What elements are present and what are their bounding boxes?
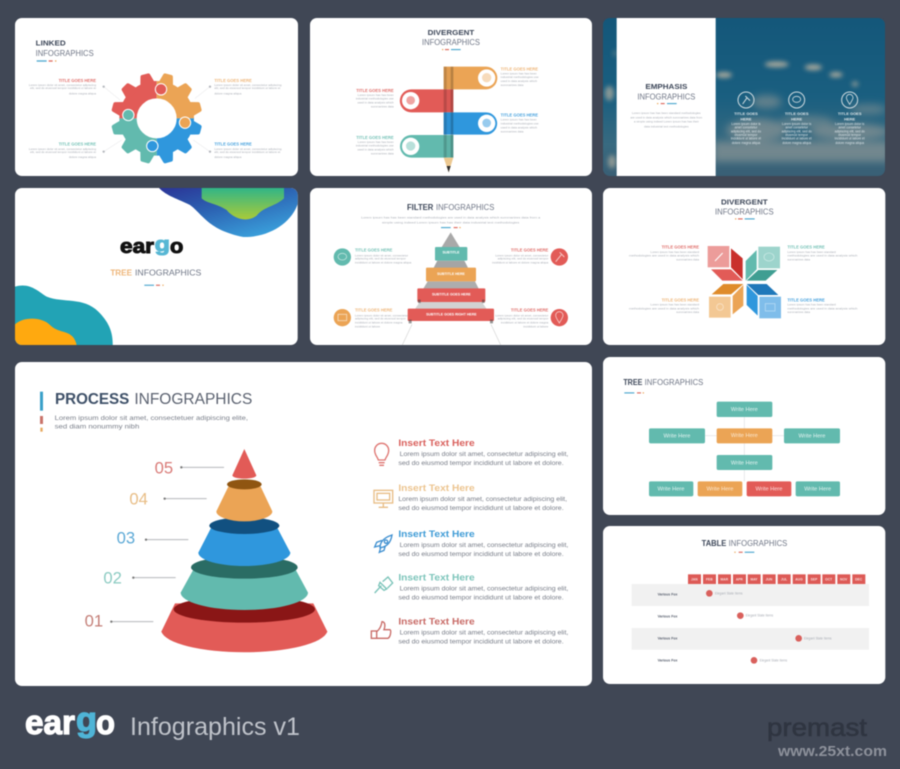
label: bottom left: Lorem ipsum has has been standard	[651, 303, 699, 307]
item 2: monitor: Lorem ipsum dolor sit amet, consectetur adipiscing elit,	[398, 496, 567, 503]
label: bottom left: Lorem ipsum dolor sit amet, consectetur adipiscing	[29, 147, 96, 151]
column: pin: eiusmod tempor	[735, 133, 757, 137]
label: top left: TITLE GOES HERE	[59, 78, 96, 83]
label: top right: methodologies are used in data analysis which	[787, 254, 858, 258]
heading: process	[40, 391, 252, 432]
item: top left: Lorem ipsum dolor sit amet, consectetur	[355, 253, 408, 257]
item: top left: adipiscing elit, sed do eiusmod tempor	[355, 257, 406, 261]
stacked filter pyramid: SUBTITLE	[442, 251, 460, 255]
panel: divergent cubes infographics	[603, 188, 885, 345]
paragraph: data industrial text methodologies	[644, 124, 689, 128]
label: orange: industrial methodologies use	[501, 75, 539, 79]
column: speech bubble: amet consetetur	[785, 126, 808, 130]
number labels with arrows: 01	[85, 612, 103, 631]
label: bottom right: dolore magna aliqua	[214, 155, 242, 159]
label: bottom left: methodologies are used in data analysis which	[629, 306, 699, 310]
label: bottom left: dolore magna aliqua	[69, 155, 96, 159]
item 1: bulb: Insert Text Here	[398, 438, 475, 448]
label: top left: summarizes data	[676, 257, 699, 261]
item 5: thumbs up: Insert Text Here	[398, 616, 475, 626]
footer logo: eargo: ear	[25, 704, 75, 742]
item: bottom right: incididunt ut labore et dolore magna	[501, 320, 549, 324]
table rows	[632, 584, 869, 664]
label: red: industrial methodologies use	[356, 97, 394, 101]
gear diagram	[104, 72, 210, 165]
item 3: rocket: Lorem ipsum dolor sit amet, consectetur adipiscing elit,	[400, 542, 569, 549]
item: top right: incididunt ut labore et dolore magna aliqua	[492, 261, 549, 265]
column: map marker: Lorem ipsum dolor is	[835, 122, 865, 126]
item: bottom right	[495, 308, 568, 328]
item 5: thumbs up	[371, 616, 569, 645]
tree chart: Write Here	[707, 487, 733, 493]
item: bottom right: incididunt ut labore	[523, 324, 549, 328]
label: top left: dolore magna aliqua	[69, 91, 96, 95]
label: top right: dolore magna aliqua	[214, 91, 242, 95]
label: red: TITLE GOES HERE	[356, 88, 394, 93]
panel: divergent pencil infographics	[310, 18, 592, 176]
tree chart: Write Here	[731, 433, 758, 439]
heading: process: PROCESS	[55, 391, 130, 408]
label: bottom right: Lorem ipsum has has been standard	[787, 303, 836, 307]
label: top left: TITLE GOES HERE	[662, 245, 699, 250]
eargo logo: g	[155, 233, 170, 256]
item: top right: Lorem ipsum dolor sit amet, consectetur	[495, 253, 548, 257]
heading: process: sed diam nonummy nibh	[55, 424, 140, 431]
label: top left	[29, 78, 105, 95]
label: bottom right: methodologies are used in data analysis which	[787, 306, 858, 310]
footer logo: eargo	[25, 701, 115, 742]
column: map marker: HERE	[844, 116, 856, 121]
label: red	[356, 88, 394, 109]
table rows: Various Fox	[658, 636, 677, 640]
item 1: bulb: Lorem ipsum dolor sit amet, consectetur adipiscing elit,	[400, 451, 569, 458]
label: teal	[356, 135, 394, 156]
pencil with flags	[400, 67, 497, 172]
heading: filter	[361, 202, 541, 228]
label: orange: used in data analysis which	[501, 79, 537, 83]
item: bottom left: adipiscing elit, sed do eiusmod tempor	[355, 317, 406, 321]
column: pin: Lorem ipsum dolor is	[731, 122, 761, 126]
heading: emphasis: INFOGRAPHICS	[637, 91, 696, 101]
heading: tree infographics: INFOGRAPHICS	[135, 268, 202, 278]
label: teal: TITLE GOES HERE	[356, 135, 394, 140]
label: bottom left	[629, 297, 699, 314]
column: speech bubble: eiusmod tempor	[785, 133, 808, 137]
heading: process: INFOGRAPHICS	[134, 391, 252, 408]
column: pin: dolore magna aliqua	[732, 141, 761, 145]
month header: SEP	[811, 577, 818, 581]
stacked filter pyramid	[402, 232, 501, 345]
item: top left	[334, 248, 412, 266]
item: top right: adipiscing elit, sed do eiusmod tempor	[498, 257, 548, 261]
label: bottom right	[209, 142, 282, 159]
label: top right	[209, 78, 282, 95]
tree chart: Write Here	[658, 487, 684, 493]
tree chart: Write Here	[804, 487, 831, 493]
eargo logo	[120, 233, 183, 258]
label: bottom right: elit, sed do eiusmod tempor incididunt ut labore et	[214, 150, 280, 154]
stacked filter pyramid: SUBTITLE GOES HERE	[432, 292, 471, 296]
item 2: monitor	[374, 483, 567, 512]
column: pin: TITLE GOES	[734, 111, 758, 116]
label: blue: summarizes data	[501, 129, 524, 133]
item: bottom right: TITLE GOES HERE	[511, 308, 549, 313]
tree chart	[649, 402, 840, 496]
stacked filter pyramid: SUBTITLE HERE	[437, 272, 466, 276]
label: bottom left: elit, sed do eiusmod tempor incididunt ut labore et	[30, 150, 96, 154]
column: map marker: dolore magna aliqua	[835, 141, 864, 145]
label: orange: summarizes data	[501, 83, 524, 87]
month header: FEB	[706, 577, 713, 581]
heading: tree: INFOGRAPHICS	[645, 377, 704, 387]
label: top left: methodologies are used in data analysis which	[629, 254, 699, 258]
column: pin: incididunt ut labore et	[731, 137, 761, 141]
bottom left blobs	[15, 286, 113, 347]
table rows: Elegant State Items	[715, 591, 743, 595]
month header: AUG	[795, 577, 803, 581]
month header: JUN	[766, 577, 773, 581]
panel: process infographics	[15, 362, 592, 686]
item 5: thumbs up: Lorem ipsum dolor sit amet, consectetur adipiscing elit,	[400, 629, 569, 636]
label: bottom right: Lorem ipsum dolor sit amet, consectetur adipiscing	[214, 147, 282, 151]
eargo logo: ear	[120, 235, 154, 258]
item 1: bulb	[375, 438, 569, 467]
item 3: rocket	[375, 529, 569, 558]
sky photo background	[603, 18, 890, 176]
panel: linked infographics	[15, 18, 298, 176]
item 2: monitor: sed do eiusmod tempor incididunt ut labore et dolore.	[398, 505, 564, 512]
table rows: Elegant State Items	[746, 614, 774, 618]
label: bottom right: summarizes data	[787, 310, 810, 314]
label: teal: summarizes data	[371, 152, 394, 156]
label: top right	[787, 245, 858, 261]
item: bottom left: incididunt ut labore	[355, 324, 380, 328]
label: orange: Lorem ipsum has has been	[501, 71, 537, 75]
column: speech bubble: incididunt ut labore et	[782, 137, 812, 141]
heading: divergent	[422, 28, 480, 50]
label: top right: summarizes data	[787, 257, 810, 261]
month header: APR	[736, 577, 743, 581]
white text column	[617, 18, 716, 176]
heading: filter: Lorem ipsum has has been standard methodologies are used in data analysis which summarizes data from a	[361, 215, 541, 219]
pyramid chart	[161, 449, 327, 652]
column: map marker: TITLE GOES	[838, 111, 862, 116]
label: blue: TITLE GOES HERE	[501, 113, 538, 118]
heading: divergent: INFOGRAPHICS	[422, 37, 480, 47]
heading: table	[702, 538, 788, 553]
heading: divergent: DIVERGENT	[428, 28, 475, 37]
label: top left: Lorem ipsum dolor sit amet, consectetur adipiscing	[29, 83, 96, 87]
column: pin: HERE	[740, 116, 752, 121]
item: top left: TITLE GOES HERE	[355, 248, 393, 253]
column: map marker: amet consetetur	[838, 126, 861, 130]
label: teal: industrial methodologies use	[356, 144, 394, 148]
heading: divergent: INFOGRAPHICS	[715, 206, 774, 216]
footer logo: eargo: o	[96, 704, 115, 742]
table rows: Elegant State Items	[760, 658, 788, 662]
label: top right: Lorem ipsum dolor sit amet, consectetur adipiscing	[214, 83, 282, 87]
label: blue: Lorem ipsum has has been	[501, 118, 537, 122]
heading: divergent: DIVERGENT	[721, 197, 768, 206]
item: bottom left: Lorem ipsum dolor sit amet, consectetur	[355, 313, 408, 317]
heading: filter: INFOGRAPHICS	[436, 202, 495, 212]
column: speech bubble: HERE	[791, 116, 803, 121]
table rows: Various Fox	[658, 615, 677, 619]
label: orange	[501, 66, 539, 87]
label: top left: Lorem ipsum has has been standard	[651, 250, 699, 254]
month header	[688, 574, 865, 584]
month header: MAR	[721, 577, 729, 581]
heading: divergent	[715, 197, 774, 219]
heading: linked: INFOGRAPHICS	[36, 48, 94, 58]
heading: tree: TREE	[623, 378, 643, 387]
heading: tree	[623, 377, 704, 393]
number labels with arrows	[85, 459, 224, 631]
item: top right: TITLE GOES HERE	[511, 248, 549, 253]
item 2: monitor: Insert Text Here	[398, 483, 475, 493]
label: blue: industrial methodologies use	[501, 121, 539, 125]
month header: JAN	[691, 577, 698, 581]
footer logo: eargo: g	[76, 701, 97, 739]
item: top left: incididunt ut labore et dolore magna aliqua	[355, 261, 412, 265]
paragraph: are used in data analysis which summarizes data from	[630, 115, 703, 119]
column: pin: amet consetetur	[735, 126, 757, 130]
label: teal: used in data analysis which	[357, 148, 394, 152]
panel: emphasis infographics	[603, 18, 890, 176]
label: top right: TITLE GOES HERE	[787, 245, 825, 250]
label: red: used in data analysis which	[357, 101, 394, 105]
label: bottom right: TITLE GOES HERE	[214, 142, 252, 147]
column: map marker: eiusmod tempor	[838, 133, 861, 137]
number labels with arrows: 03	[117, 528, 135, 547]
watermark: site url: www.25xt.com	[777, 743, 887, 760]
column: speech bubble: dolore magna aliqua	[782, 141, 811, 145]
label: orange: TITLE GOES HERE	[501, 66, 538, 71]
item: bottom right: adipiscing elit, sed do eiusmod tempor	[498, 317, 548, 321]
item 3: rocket: Insert Text Here	[398, 529, 475, 539]
heading: tree infographics: TREE	[110, 268, 132, 278]
column: map marker: adipiscing elit, sed do	[835, 129, 865, 133]
item: top right	[492, 248, 568, 266]
panel: eargo tree cover	[15, 185, 298, 347]
heading: emphasis	[637, 82, 696, 104]
month header: NOV	[840, 577, 848, 581]
item 5: thumbs up: sed do eiusmod tempor incididunt ut labore et dolore.	[398, 638, 564, 645]
item 4: push pin: sed do eiusmod tempor incididunt ut labore et dolore.	[398, 595, 564, 602]
label: bottom right	[787, 297, 858, 314]
number labels with arrows: 05	[155, 459, 173, 478]
item 1: bulb: sed do eiusmod tempor incididunt ut labore et dolore.	[398, 460, 564, 467]
column: map marker	[835, 92, 865, 145]
panel: tree infographics	[603, 357, 885, 515]
watermark: premast: premast	[767, 714, 867, 742]
column: speech bubble: TITLE GOES	[785, 111, 809, 116]
heading: linked: LINKED	[36, 39, 66, 48]
item: bottom left: incididunt ut labore et dolore magna	[355, 320, 403, 324]
heading: process: Lorem ipsum dolor sit amet, consectetuer adipiscing elite,	[55, 415, 248, 422]
label: red: Lorem ipsum has has been	[358, 93, 394, 97]
column: speech bubble: adipiscing elit, sed do	[782, 129, 812, 133]
item 4: push pin: Lorem ipsum dolor sit amet, consectetur adipiscing elit,	[400, 586, 569, 593]
label: bottom left: summarizes data	[676, 310, 699, 314]
tree chart: Write Here	[664, 434, 690, 440]
item: bottom left: TITLE GOES HERE	[355, 308, 393, 313]
column: map marker: incididunt ut labore et	[835, 137, 865, 141]
paragraph: Lorem ipsum has has been standard methodologies	[632, 111, 701, 115]
item 3: rocket: sed do eiusmod tempor incididunt ut labore et dolore.	[398, 551, 564, 558]
column: pin	[731, 92, 761, 145]
label: bottom left: TITLE GOES HERE	[59, 142, 96, 147]
heading: table: INFOGRAPHICS	[729, 538, 788, 548]
tree chart: Write Here	[756, 487, 782, 493]
stacked filter pyramid: SUBTITLE GOES RIGHT HERE	[426, 312, 477, 316]
footer title: Infographics v1	[130, 713, 300, 741]
heading: filter: simple using indeed Lorem ipsum has has their data industrial text methodologies	[382, 220, 520, 224]
heading: filter: FILTER	[407, 203, 434, 212]
label: bottom left	[29, 142, 105, 159]
table rows: Elegant State Items	[804, 636, 832, 640]
panel: table infographics	[603, 526, 885, 684]
tree chart: Write Here	[731, 460, 758, 466]
four-way cube diagram	[708, 246, 781, 318]
month header: DEC	[855, 577, 863, 581]
label: top left: elit, sed do eiusmod tempor incididunt ut labore et	[30, 86, 96, 90]
column: speech bubble: Lorem ipsum dolor is	[782, 122, 812, 126]
paragraph: a simple using indeed Lorem ipsum has has their	[634, 120, 699, 124]
table rows: Various Fox	[658, 592, 677, 596]
paragraph	[630, 111, 703, 128]
panel: filter infographics	[310, 188, 592, 345]
label: bottom right: TITLE GOES HERE	[787, 297, 825, 302]
label: bottom left: TITLE GOES HERE	[662, 297, 699, 302]
item 4: push pin: Insert Text Here	[398, 573, 475, 583]
column: pin: adipiscing elit, sed do	[731, 129, 761, 133]
heading: table: TABLE	[702, 539, 727, 548]
month header: MAY	[750, 577, 758, 581]
item 4: push pin	[375, 573, 569, 602]
item: bottom left	[334, 308, 408, 328]
heading: tree infographics	[110, 268, 202, 286]
heading: linked	[36, 39, 94, 62]
top right blobs	[157, 185, 298, 237]
label: top right: Lorem ipsum has has been standard	[787, 250, 836, 254]
month header: OCT	[825, 577, 832, 581]
label: blue	[501, 113, 539, 133]
table rows: Various Fox	[658, 659, 677, 663]
month header: JUL	[781, 577, 787, 581]
tree chart: Write Here	[731, 407, 758, 413]
item: bottom right: Lorem ipsum dolor sit amet, consectetur	[495, 313, 548, 317]
label: top right: elit, sed do eiusmod tempor incididunt ut labore et	[214, 86, 280, 90]
column: speech bubble	[782, 92, 812, 145]
label: teal: Lorem ipsum has has been	[358, 140, 394, 144]
label: top left	[629, 245, 699, 261]
label: blue: used in data analysis which	[501, 125, 537, 129]
label: red: summarizes data	[371, 105, 394, 109]
tree chart: Write Here	[799, 434, 825, 440]
label: top right: TITLE GOES HERE	[214, 78, 252, 83]
number labels with arrows: 04	[129, 490, 148, 509]
heading: emphasis: EMPHASIS	[645, 82, 687, 91]
eargo logo: o	[170, 235, 183, 258]
number labels with arrows: 02	[103, 568, 122, 587]
